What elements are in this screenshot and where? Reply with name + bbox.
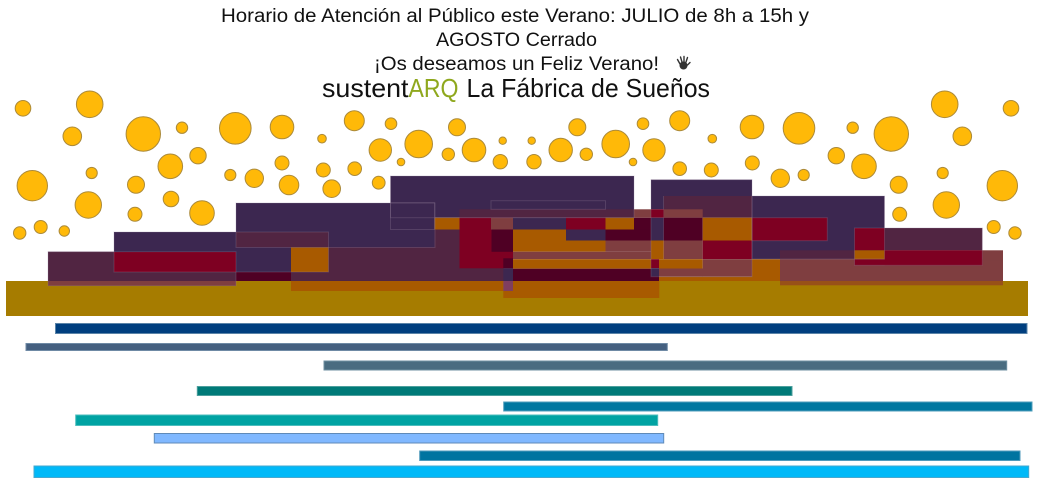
icon: hand [678,56,690,70]
bar 6 turquoise [76,415,658,426]
brand heading: La Fábrica de Sueños [466,73,710,103]
overlapping skyline chart [6,176,1028,316]
title block [221,6,810,103]
right stacked blocks [651,180,1003,285]
notice: opening hours line 2: AGOSTO Cerrado [436,30,597,51]
bar 4 dark teal [197,386,792,396]
bar 9 cyan [34,466,1029,478]
bar 2 slate blue [26,344,667,350]
ochre ground band [6,281,1028,316]
central stacked blocks [390,176,659,298]
yellow bubbles [14,91,1021,239]
brand heading [322,73,710,103]
translucent block outlines [48,176,982,286]
greeting: ¡Os deseamos un Feliz Verano! [374,54,659,75]
bar 5 blue [504,402,1032,411]
bar 3 slate teal [324,361,1007,370]
notice: opening hours line 1: Horario de Atención al Público este Verano: JULIO de 8h a 15h y [221,6,810,27]
brand heading: ARQ [408,73,458,103]
bar 1 navy [56,324,1027,334]
left stacked blocks [48,203,504,291]
bar 8 blue [420,451,1020,460]
horizontal blue bars [26,324,1032,478]
bar 7 light blue [154,434,664,443]
brand heading: sustent [322,73,409,103]
